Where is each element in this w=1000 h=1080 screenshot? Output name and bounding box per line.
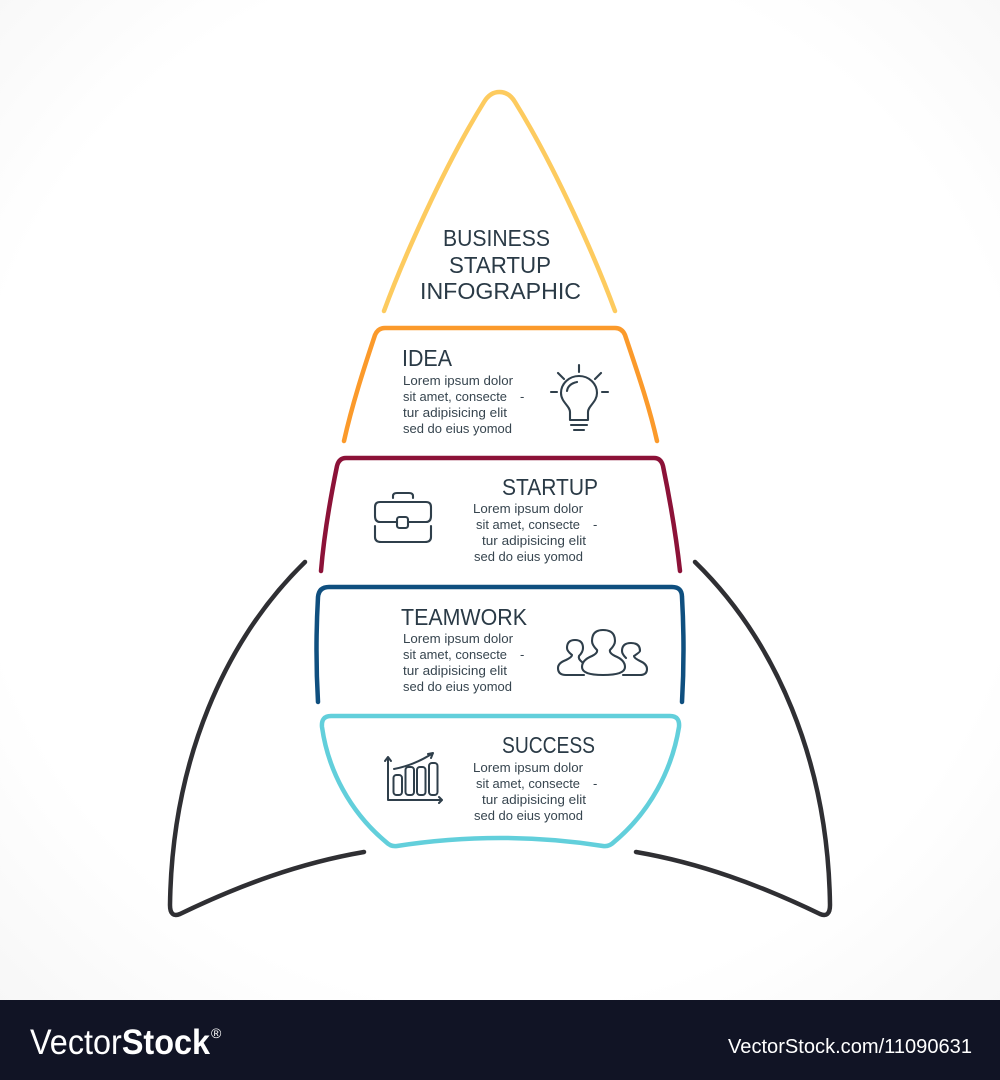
heading: idea: IDEA [402,345,453,371]
text block: teamwork: sit amet, consecte [403,647,507,662]
text block: teamwork [403,631,524,694]
text block: startup [473,501,597,564]
title text: STARTUP [449,252,551,278]
left fin [170,562,364,915]
text block: startup: tur adipisicing elit [482,533,586,548]
heading: success: SUCCESS [502,732,595,758]
text block: startup: - [593,517,597,532]
title text: INFOGRAPHIC [420,278,581,304]
text block: teamwork: Lorem ipsum dolor [403,631,514,646]
text block: success: tur adipisicing elit [482,792,586,807]
panel: idea [344,328,657,441]
heading: startup: STARTUP [502,474,598,500]
title text [420,225,581,304]
text block: success: Lorem ipsum dolor [473,760,584,775]
logo: ® [211,1025,222,1041]
text block: teamwork: - [520,647,524,662]
icon: growth chart [385,753,442,803]
rocket nose segment [384,92,615,311]
panel: success [322,716,679,846]
text block: idea: Lorem ipsum dolor [403,373,514,388]
icon: light bulb [551,365,608,430]
text block: success [473,760,597,823]
text block: idea: sed do eius yomod [403,421,512,436]
icon: team [558,630,647,675]
footer bar [0,1000,1000,1080]
image id: VectorStock.com/11090631 [728,1036,972,1058]
panel: startup [321,458,680,571]
text block: idea [403,373,524,436]
icon: briefcase [375,493,431,542]
text block: teamwork: tur adipisicing elit [403,663,507,678]
text block: teamwork: sed do eius yomod [403,679,512,694]
panel: teamwork [316,587,684,702]
text block: idea: sit amet, consecte [403,389,507,404]
text block: success: - [593,776,597,791]
text block: success: sed do eius yomod [474,808,583,823]
text block: startup: Lorem ipsum dolor [473,501,584,516]
title text: BUSINESS [443,225,550,251]
text block: idea: - [520,389,524,404]
text block: startup: sit amet, consecte [476,517,580,532]
heading: teamwork: TEAMWORK [401,604,528,630]
logo: VectorStock [30,1023,210,1062]
right fin [636,562,830,915]
text block: idea: tur adipisicing elit [403,405,507,420]
text block: success: sit amet, consecte [476,776,580,791]
text block: startup: sed do eius yomod [474,549,583,564]
